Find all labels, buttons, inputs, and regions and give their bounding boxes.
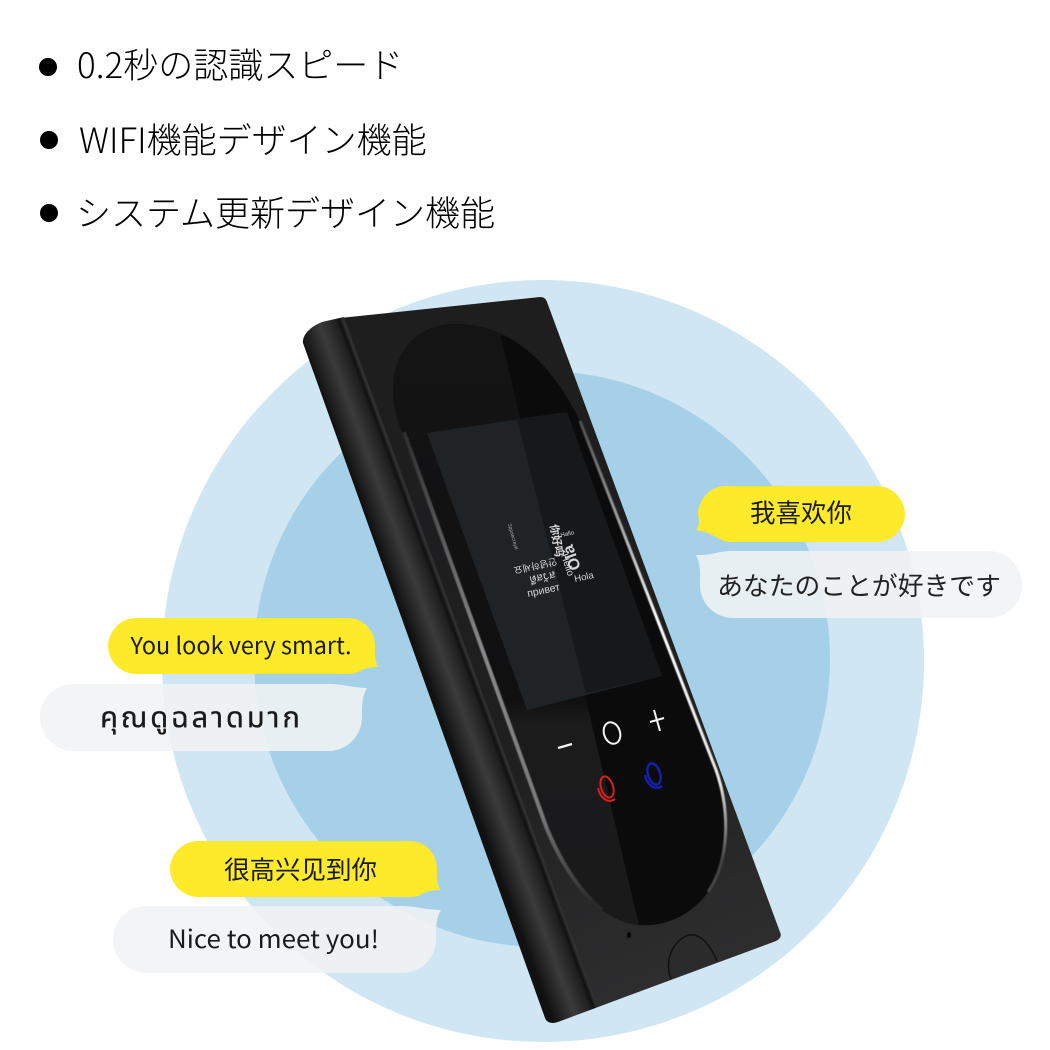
yellow bubble: 很高兴见到你 [224,850,377,887]
display greeting words: Здравствуй [506,523,520,551]
microphone dot [627,932,631,938]
screen pill [380,320,726,940]
display greeting words [506,523,595,600]
icon: plus [650,710,664,731]
background concentric circles [162,280,924,1042]
display greeting words: Hello [558,553,576,578]
icon: minus [558,744,572,748]
grey bubble [40,684,367,751]
grey bubble [696,551,1022,618]
bullet 1: 0.2秒の認識スピード [77,38,403,89]
grey bubble: Nice to meet you! [168,920,379,956]
device side bevel [303,317,598,1023]
display [427,412,662,710]
display greeting words: 你好吗 [547,523,567,558]
yellow bubble [170,841,440,897]
display greeting words: สวัสดี [528,568,557,586]
chat pair: Chinese and Japanese [696,486,1022,618]
display greeting words: Hallo [560,530,575,539]
yellow bubble: 我喜欢你 [750,493,852,530]
translator device [303,297,781,1023]
display greeting words: Olá [560,542,585,572]
chat pair: Thai [40,618,378,751]
icon: red microphone [598,775,616,801]
grey bubble [113,906,441,973]
bullet 2: WIFI機能デザイン機能 [79,113,427,164]
yellow bubble: You look very smart. [130,627,352,661]
display greeting words: Hola [573,570,595,585]
home button [668,935,717,979]
icon: circle button [601,720,623,746]
grey bubble: あなたのことが好きです [717,566,1001,603]
icon: blue microphone [645,762,663,788]
device body [340,297,781,1010]
display greeting words: привет [526,581,561,600]
bullet 3: システム更新デザイン機能 [76,186,495,237]
chat pair: Chinese and English [113,841,441,973]
yellow bubble [696,486,905,542]
yellow bubble [108,618,378,674]
grey bubble: คุณดูฉลาดมาก [100,697,303,741]
bullet list heading [39,38,495,237]
display greeting words: 안녕하세요 [512,555,558,576]
